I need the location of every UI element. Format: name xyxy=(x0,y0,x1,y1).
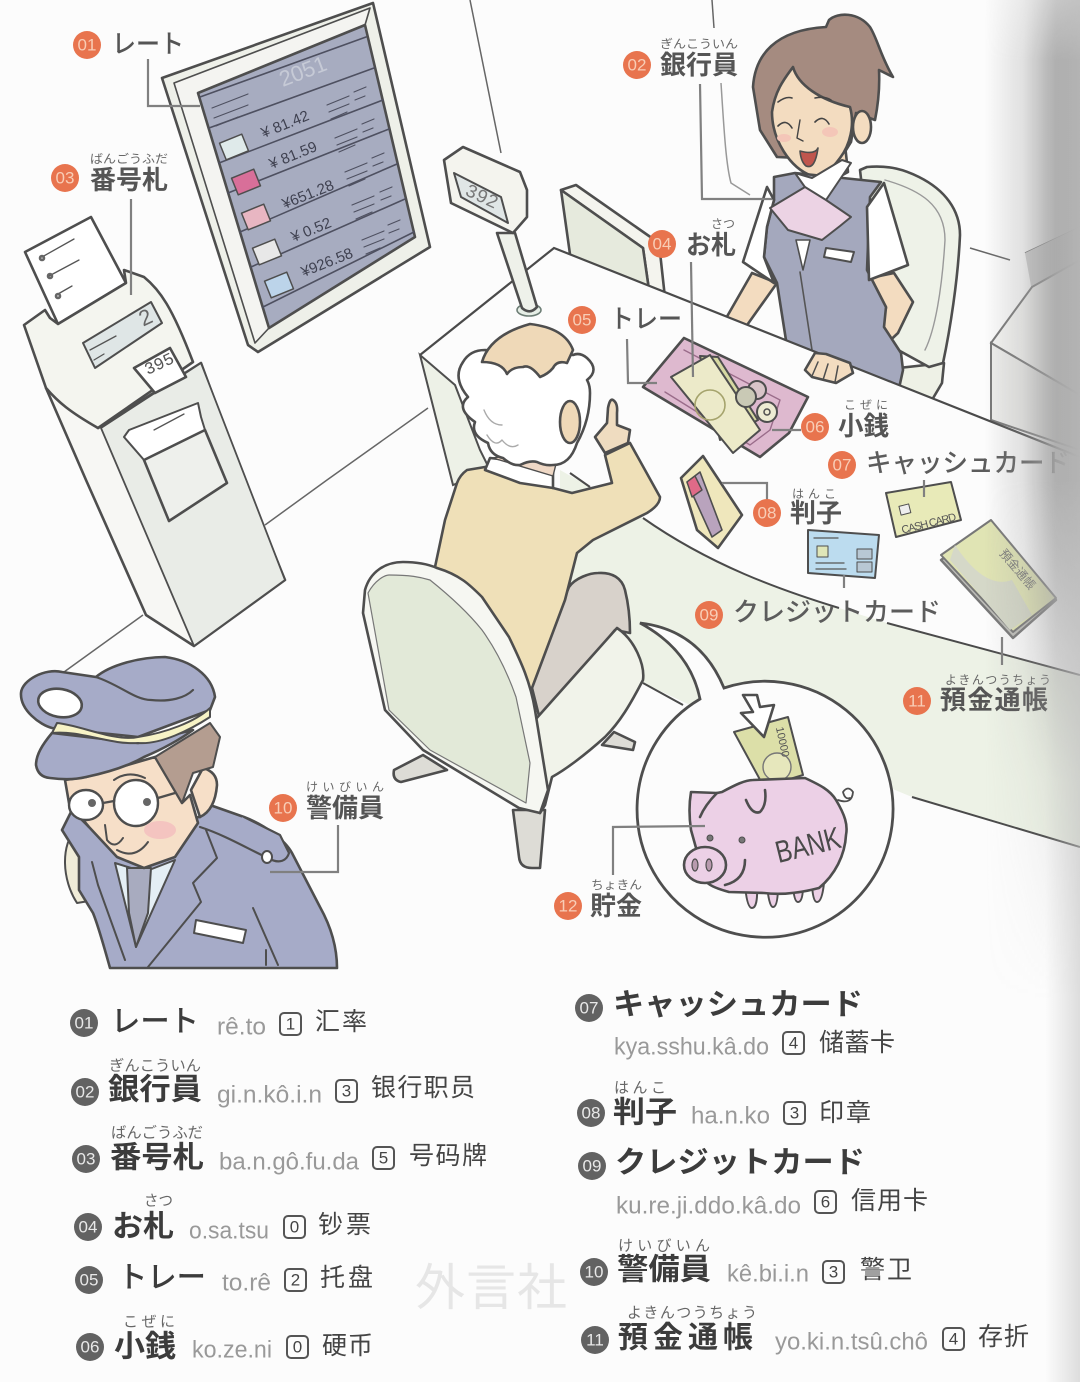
entry 06: こぜに xyxy=(123,1314,175,1330)
chair back inner panel xyxy=(368,575,530,803)
entry 09: クレジットカード xyxy=(615,1146,865,1180)
entry 07: 4 xyxy=(789,1034,798,1052)
entry 08: 判子 xyxy=(613,1096,677,1130)
entry 03 xyxy=(72,1124,487,1176)
entry 03: 号码牌 xyxy=(409,1142,487,1170)
entry 09: 6 xyxy=(821,1192,830,1212)
entry 06: 小銭 xyxy=(114,1330,176,1364)
label 02 bank teller: 02 xyxy=(628,56,646,74)
entry 02: ぎんこういん xyxy=(109,1058,201,1074)
guard hair xyxy=(155,723,220,803)
entry 03: 番号札 xyxy=(110,1142,204,1174)
number display: 2 xyxy=(135,303,156,331)
teller ear xyxy=(853,111,871,143)
shirt xyxy=(115,860,175,947)
entry 03: ばんごうふだ xyxy=(111,1124,203,1142)
label 05 tray: 05 xyxy=(573,310,591,330)
entry 02: 3 xyxy=(342,1082,351,1100)
label 04 banknote xyxy=(648,217,736,260)
yellow band xyxy=(52,708,210,743)
shirt front xyxy=(796,240,810,270)
entry 05: 05 xyxy=(80,1270,98,1290)
entry 01: rê.to xyxy=(217,1014,266,1040)
label 08 seal: 08 xyxy=(758,504,776,522)
tail xyxy=(838,788,853,801)
entry 08 xyxy=(577,1080,871,1130)
label 03 number tag xyxy=(51,151,168,195)
ear xyxy=(560,401,580,443)
entry 07: kya.sshu.kâ.do xyxy=(614,1034,769,1060)
label 10 security guard xyxy=(269,780,384,823)
ticket 395 xyxy=(134,348,186,393)
entry 10 xyxy=(580,1238,912,1288)
trousers xyxy=(530,573,630,720)
label 09 credit card: クレジットカード xyxy=(733,597,941,627)
security guard xyxy=(21,657,337,968)
label 11 passbook xyxy=(903,673,1051,715)
label 02 bank teller: 銀行員 xyxy=(660,50,738,80)
entry 02: 銀行員 xyxy=(108,1074,202,1106)
counter back edge xyxy=(420,248,1080,457)
seal case xyxy=(681,456,742,548)
label 07 cash card: キャッシュカード xyxy=(866,448,1070,478)
entry 04: 0 xyxy=(290,1218,299,1236)
entry 01: 汇率 xyxy=(315,1008,367,1036)
entry 04: 04 xyxy=(79,1218,97,1236)
entry 02 xyxy=(71,1058,475,1108)
collar xyxy=(795,160,851,200)
snout xyxy=(684,847,726,883)
label 09 credit card: 09 xyxy=(700,606,718,624)
label 12 savings: 12 xyxy=(559,896,577,916)
machine top xyxy=(24,270,193,428)
exchange rate board xyxy=(162,3,430,352)
entry 01: 01 xyxy=(75,1014,93,1032)
shoulder strap xyxy=(200,817,289,861)
entry 11: よきんつうちょう xyxy=(627,1304,757,1322)
entry 11: 存折 xyxy=(978,1323,1029,1351)
brows nose mouth xyxy=(105,774,148,854)
rate values: ¥ 81.59 xyxy=(266,138,320,173)
watermark: 外言社 xyxy=(415,1260,567,1316)
label 06 coins: 小銭 xyxy=(838,411,889,441)
number display xyxy=(83,302,162,368)
entry 04: お札 xyxy=(112,1210,174,1244)
page gutter shadow at right edge xyxy=(996,0,1080,1382)
label 12 savings: 貯金 xyxy=(590,891,642,921)
entry 09: 信用卡 xyxy=(851,1187,928,1215)
chair back xyxy=(363,562,548,813)
entry 03: 03 xyxy=(77,1150,95,1168)
rate values: ¥926.58 xyxy=(298,245,355,281)
entry 04: o.sa.tsu xyxy=(189,1218,269,1244)
computer monitor xyxy=(561,185,666,320)
face xyxy=(65,757,198,868)
legs xyxy=(745,883,824,908)
white sleeves xyxy=(743,183,908,283)
entry 01 xyxy=(70,1006,367,1040)
white curly hair xyxy=(459,350,594,465)
lapels xyxy=(92,830,217,967)
machine right face xyxy=(101,363,285,646)
rate values: ¥ 81.42 xyxy=(258,107,312,142)
cash card: CASH CARD xyxy=(900,511,958,537)
rate values: ¥651.28 xyxy=(279,177,336,213)
label 03 number tag: 03 xyxy=(56,168,74,188)
scribbles xyxy=(212,87,400,254)
pocket seam xyxy=(253,908,278,965)
vocabulary list: right column xyxy=(575,988,1029,1356)
entry 06: 硬币 xyxy=(322,1332,373,1360)
label 10 security guard: 警備員 xyxy=(306,793,384,823)
entry 09: ku.re.ji.ddo.kâ.do xyxy=(616,1192,801,1220)
rate values: ¥ 0.52 xyxy=(288,214,334,246)
entry 09 xyxy=(578,1146,928,1220)
teller hair xyxy=(753,15,893,160)
label 03 number tag: ばんごうふだ xyxy=(90,151,168,166)
customer's chair xyxy=(363,562,643,868)
body xyxy=(690,778,847,894)
entry 06 xyxy=(76,1314,373,1364)
entry 06: 06 xyxy=(81,1338,99,1356)
entry 01: 1 xyxy=(286,1014,295,1034)
banknote in slot: 10000 xyxy=(773,726,791,758)
counter side panel xyxy=(420,355,490,485)
entry 02: 02 xyxy=(76,1082,94,1102)
teller's hand xyxy=(805,353,853,383)
teller arms xyxy=(721,273,913,373)
chair post xyxy=(513,810,545,868)
chair feet xyxy=(394,755,447,782)
label 11 passbook: 預金通帳 xyxy=(940,685,1048,715)
rate values xyxy=(258,107,355,281)
entry 10: kê.bi.i.n xyxy=(727,1260,809,1288)
coins xyxy=(736,381,777,422)
guard jacket xyxy=(62,805,337,968)
label 04 banknote: お札 xyxy=(686,230,736,260)
paper instruction sheet xyxy=(25,217,126,324)
ticket 395: 395 xyxy=(142,350,178,381)
label 05 tray xyxy=(568,304,682,334)
brochure pocket xyxy=(124,403,227,521)
eyes xyxy=(707,835,713,841)
label 04 banknote: さつ xyxy=(711,217,735,231)
teller's chair xyxy=(860,167,960,405)
label 10 security guard: けいびいん xyxy=(306,780,384,794)
entry 06: ko.ze.ni xyxy=(192,1336,272,1364)
entry 07: 07 xyxy=(580,998,598,1018)
rate rows xyxy=(200,37,414,307)
pink scarf xyxy=(770,187,851,240)
counter front face xyxy=(560,470,1080,848)
label 04 banknote: 04 xyxy=(653,234,671,254)
rate screen xyxy=(198,25,415,328)
entry 07: キャッシュカード xyxy=(613,988,863,1022)
label 06 coins xyxy=(801,398,889,441)
glasses xyxy=(69,780,175,826)
jacket body xyxy=(420,443,660,720)
entry 05 xyxy=(75,1262,373,1296)
label 02 bank teller: ぎんこういん xyxy=(660,37,738,51)
entry 04: さつ xyxy=(144,1192,173,1210)
entry 08: 印章 xyxy=(819,1099,871,1127)
entry 03: ba.n.gô.fu.da xyxy=(219,1148,360,1176)
entry 08: はんこ xyxy=(614,1080,666,1096)
entry 08: 3 xyxy=(790,1104,799,1122)
ear xyxy=(191,768,217,817)
entry 10: 10 xyxy=(585,1262,603,1282)
entry 11: yo.ki.n.tsû.chô xyxy=(775,1328,928,1356)
label 08 seal: はんこ xyxy=(792,487,836,501)
teller neck xyxy=(800,145,848,190)
cap visor xyxy=(36,730,193,779)
hair curls xyxy=(484,410,518,447)
pink neck xyxy=(493,455,556,476)
vocabulary list: left column xyxy=(70,1006,487,1364)
machine body xyxy=(46,363,285,646)
cheek xyxy=(144,821,176,839)
tie xyxy=(127,868,151,947)
label 08 seal xyxy=(753,487,842,528)
teller face xyxy=(772,67,852,176)
wall and room lines xyxy=(64,0,1080,672)
label 12 savings xyxy=(554,878,642,921)
background booth at right edge xyxy=(991,227,1080,450)
entry 10: けいびいん xyxy=(618,1238,710,1254)
label 01 rate: レート xyxy=(112,29,184,59)
entry 11: 11 xyxy=(586,1330,604,1350)
entry 06: 0 xyxy=(293,1338,302,1356)
bubble xyxy=(637,623,893,937)
cap crease xyxy=(96,677,193,701)
pointing hand xyxy=(595,400,630,453)
name badge xyxy=(194,920,246,943)
entry 07: 储蓄卡 xyxy=(819,1029,895,1057)
entry 02: 银行职员 xyxy=(371,1074,475,1102)
banknotes xyxy=(700,356,758,440)
right chair foot xyxy=(602,732,635,750)
passbook xyxy=(941,520,1056,638)
passbook: 預金通帳 xyxy=(997,546,1039,592)
entry 01: レート xyxy=(111,1006,199,1038)
display number 392: 392 xyxy=(461,180,502,214)
label 08 seal: 判子 xyxy=(790,498,842,528)
money tray xyxy=(643,338,808,457)
entry 08: ha.n.ko xyxy=(691,1102,770,1130)
entry 05: to.rê xyxy=(222,1270,271,1296)
label 06 coins: 06 xyxy=(806,418,824,436)
entry 05: 2 xyxy=(291,1270,300,1290)
entry 11: 4 xyxy=(949,1330,958,1348)
entry 02: gi.n.kô.i.n xyxy=(217,1082,322,1108)
entry 05: トレー xyxy=(118,1262,206,1294)
counter edge lines xyxy=(570,473,1080,847)
teller vest xyxy=(764,173,903,393)
label 06 coins: こぜに xyxy=(844,398,888,412)
cash card xyxy=(886,482,961,537)
entry 03: 5 xyxy=(379,1148,388,1168)
customer: elderly man xyxy=(420,324,660,720)
cap crown xyxy=(21,657,215,737)
piggy bank xyxy=(684,778,853,908)
BANK lettering: BANK xyxy=(772,820,844,870)
label 11 passbook: 11 xyxy=(908,692,926,710)
neck and collar xyxy=(485,458,553,488)
speech bubble with piggy bank xyxy=(637,623,893,937)
label 01 rate xyxy=(73,29,184,59)
entry 10: 3 xyxy=(829,1262,838,1282)
bald head xyxy=(482,324,573,377)
bank teller xyxy=(721,15,913,393)
entry 05: 托盘 xyxy=(320,1264,373,1292)
entry 09: 09 xyxy=(583,1156,601,1176)
flags xyxy=(220,134,293,298)
label leaders xyxy=(131,59,1002,875)
name tag xyxy=(824,248,854,262)
shoulder button xyxy=(262,851,272,863)
header date: 2051 xyxy=(276,51,330,92)
label 07 cash card: 07 xyxy=(833,456,851,474)
label 10 security guard: 10 xyxy=(274,798,292,818)
down arrow xyxy=(741,695,774,737)
credit card xyxy=(808,530,879,578)
entry 10: 警卫 xyxy=(860,1256,912,1284)
entry 08: 08 xyxy=(582,1104,600,1122)
rope xyxy=(65,827,95,903)
entry 10: 警備員 xyxy=(617,1254,711,1286)
banknote in slot xyxy=(734,717,803,787)
label 01 rate: 01 xyxy=(78,36,96,54)
number sign stand xyxy=(444,147,541,316)
entry 11 xyxy=(581,1304,1029,1356)
cap oval badge xyxy=(36,685,84,721)
entry 04: 钞票 xyxy=(318,1211,371,1239)
entry 07 xyxy=(575,988,895,1060)
label 02 bank teller xyxy=(623,37,738,80)
entry 11: 預金通帳 xyxy=(618,1322,753,1354)
label 11 passbook: よきんつうちょう xyxy=(945,673,1051,687)
label 05 tray: トレー xyxy=(610,304,682,334)
counter top xyxy=(420,248,1080,675)
entry 04 xyxy=(74,1192,371,1244)
ear lines and smile xyxy=(700,790,765,885)
chair seat xyxy=(535,628,643,813)
ticket machine xyxy=(24,217,285,646)
label 12 savings: ちょきん xyxy=(591,878,642,892)
label 03 number tag: 番号札 xyxy=(90,165,168,195)
